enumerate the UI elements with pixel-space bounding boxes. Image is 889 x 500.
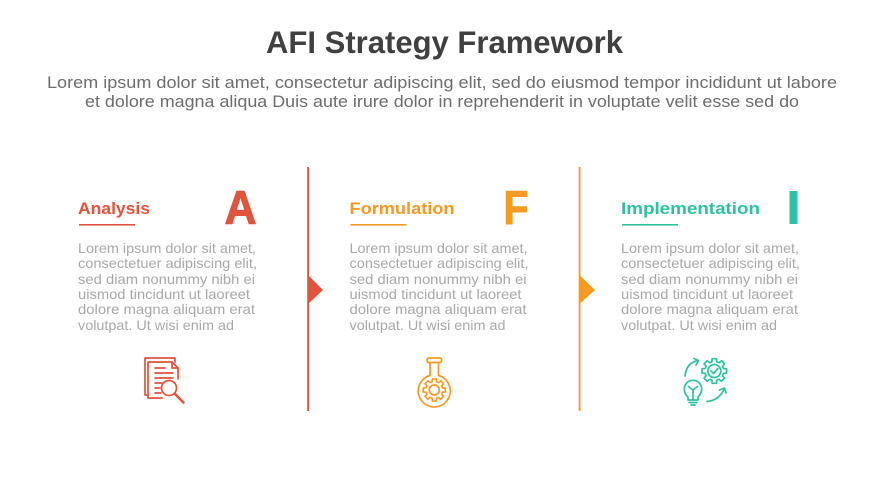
subtitle: et dolore magna aliqua Duis aute irure dolor in reprehenderit in voluptate velit esse sed do [85,92,799,111]
heading underline: implementation [622,224,678,226]
body text: formulation: sed diam nonummy nibh ei [350,272,526,287]
body text: formulation: consectetuer adipiscing elit, [350,256,528,271]
body text: formulation: dolore magna aliquam erat [350,302,527,317]
panel: formulation [350,181,528,407]
body text: implementation: Lorem ipsum dolor sit amet, [621,241,799,256]
icon: lightbulb, gear and cycle arrows [684,358,727,405]
body text: formulation [350,241,528,333]
subtitle [47,73,837,111]
body text: implementation: dolore magna aliquam erat [621,302,798,317]
body text: implementation: sed diam nonummy nibh ei [621,272,798,287]
body text: implementation [621,241,800,333]
body text: analysis [78,241,257,333]
letter A: A [224,181,256,234]
body text: analysis: consectetuer adipiscing elit, [78,256,257,271]
divider with arrow: analysis to formulation [307,167,323,411]
body text: analysis: Lorem ipsum dolor sit amet, [78,241,256,256]
body text: formulation: volutpat. Ut wisi enim ad [350,318,506,333]
heading: formulation: Formulation [350,199,454,218]
heading: analysis: Analysis [78,199,150,218]
title: AFI Strategy Framework [266,24,623,60]
body text: analysis: sed diam nonummy nibh ei [78,272,255,287]
body text: implementation: volutpat. Ut wisi enim ad [621,318,777,333]
heading underline: analysis [79,224,135,226]
body text: formulation: Lorem ipsum dolor sit amet, [350,241,528,256]
subtitle: Lorem ipsum dolor sit amet, consectetur adipiscing elit, sed do eiusmod tempor incididunt ut labore [47,73,837,92]
body text: implementation: consectetuer adipiscing elit, [621,256,800,271]
body text: analysis: uismod tincidunt ut laoreet [78,287,250,302]
panel: implementation [621,191,800,405]
body text: formulation: uismod tincidunt ut laoreet [350,287,522,302]
divider with arrow: formulation to implementation [579,167,595,411]
body text: analysis: volutpat. Ut wisi enim ad [78,318,234,333]
body text: analysis: dolore magna aliquam erat [78,302,255,317]
heading underline: formulation [350,224,406,226]
icon: document with magnifier [145,358,184,402]
letter F: F [504,181,528,234]
panel: analysis [78,181,257,402]
icon: flask with gear [418,358,450,407]
heading: implementation: Implementation [621,199,760,218]
letter I [790,191,798,224]
body text: implementation: uismod tincidunt ut laoreet [621,287,793,302]
